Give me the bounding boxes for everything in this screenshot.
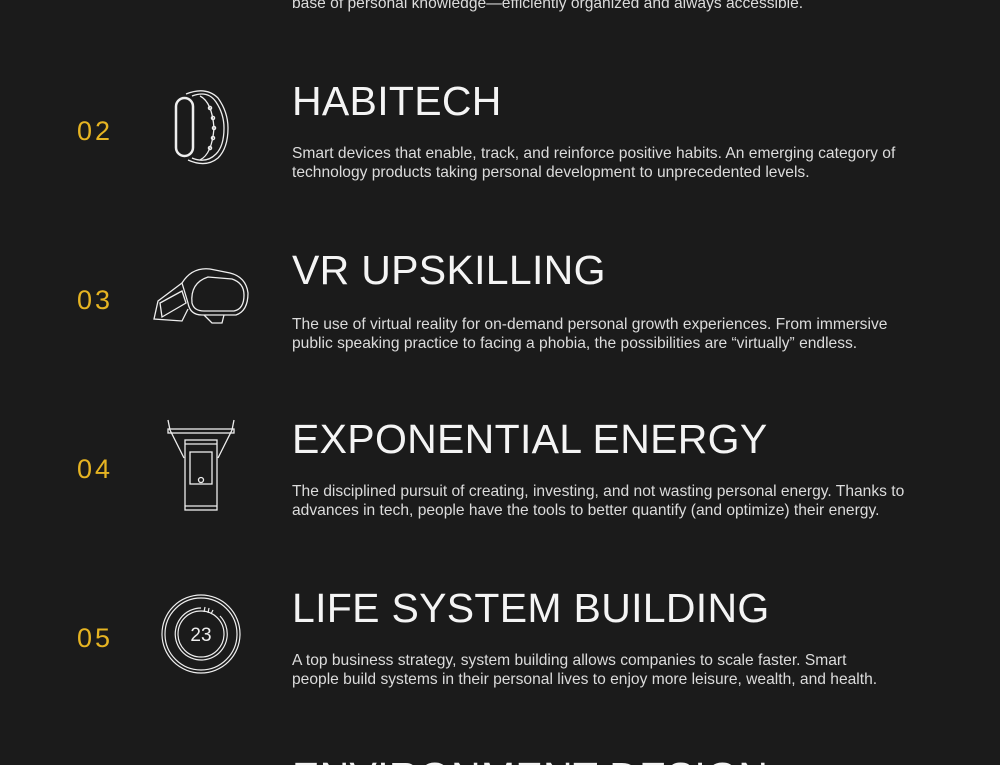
row 03: vr upskilling xyxy=(77,247,887,352)
title: EXPONENTIAL ENERGY xyxy=(292,416,768,462)
title: LIFE SYSTEM BUILDING xyxy=(292,585,770,631)
row 05: life system building xyxy=(77,585,877,688)
icon: thermostat dial: 23 xyxy=(190,625,212,646)
row 02: habitech xyxy=(77,78,896,181)
icon: VR headset xyxy=(153,268,249,324)
icon: fitness band xyxy=(174,90,229,164)
number 02: 02 xyxy=(77,116,113,146)
number 05: 05 xyxy=(77,623,113,653)
row 04: exponential energy xyxy=(77,416,904,519)
title: HABITECH xyxy=(292,78,502,124)
description: The use of virtual reality for on-demand personal growth experiences. From immersive public speaking practice to facing a phobia, the possibilities are “virtually” endless. xyxy=(292,316,887,352)
number 03: 03 xyxy=(77,285,113,315)
number 04: 04 xyxy=(77,454,113,484)
description: A top business strategy, system building allows companies to scale faster. Smart people build systems in their personal lives to enjoy more leisure, wealth, and health. xyxy=(292,652,877,688)
title: VR UPSKILLING xyxy=(292,247,606,293)
description: The disciplined pursuit of creating, investing, and not wasting personal energy. Thanks to advances in tech, people have the tools to better quantify (and optimize) their energy. xyxy=(292,483,904,519)
icon: standing device xyxy=(167,420,235,511)
description: Smart devices that enable, track, and reinforce positive habits. An emerging category of technology products taking personal development to unprecedented levels. xyxy=(292,145,895,181)
icon: thermostat dial xyxy=(161,594,241,674)
